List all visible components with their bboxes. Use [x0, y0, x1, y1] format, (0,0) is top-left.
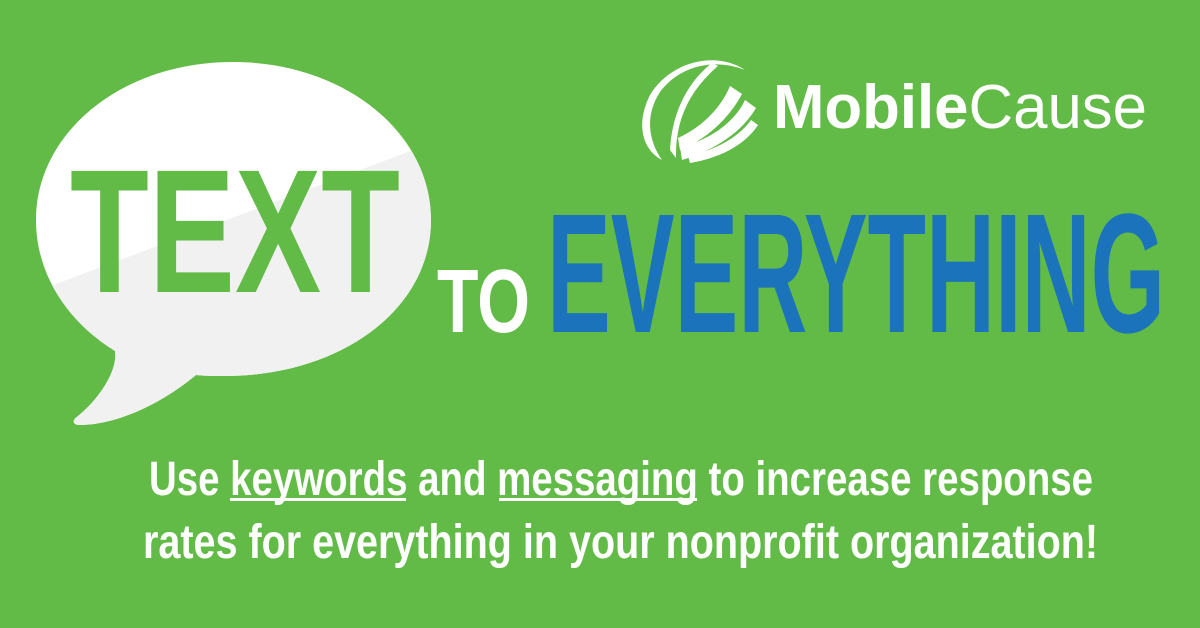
text block: subtitle	[143, 453, 1098, 569]
heading: TO: TO	[437, 252, 530, 352]
icon: speech bubble	[36, 62, 431, 425]
icon: globe	[642, 60, 758, 163]
logo text: MobileCause	[773, 73, 1147, 142]
heading: TEXT: TEXT	[70, 134, 400, 330]
logo: MobileCause	[642, 60, 1147, 163]
